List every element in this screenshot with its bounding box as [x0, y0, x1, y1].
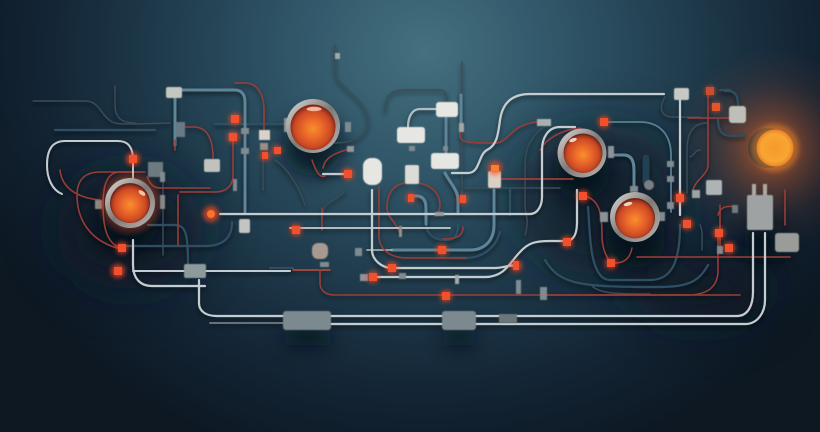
- lamp and box cast shadows: [98, 116, 781, 346]
- round knob: [644, 180, 654, 190]
- glow around red indicators: [111, 86, 735, 302]
- lamp: lower right: [610, 192, 660, 242]
- lamp: centre right: [558, 128, 606, 178]
- light grey junction boxes: [166, 87, 799, 278]
- lamp: far left: [96, 169, 164, 237]
- red indicator squares: [114, 87, 733, 300]
- navy pipes: [55, 90, 745, 287]
- dark zones on the wall: [55, 125, 770, 325]
- grey slate boxes and fittings: [95, 53, 767, 330]
- silver pipes: [47, 94, 765, 324]
- orange glow behind right lamp: [672, 48, 820, 248]
- pipe network: [33, 45, 790, 324]
- dark thin wires: [33, 45, 707, 294]
- slate wires: [367, 122, 671, 250]
- red wires: [60, 83, 790, 295]
- lamp: top centre: [286, 99, 340, 153]
- white junction boxes: [363, 102, 501, 188]
- lamp: glowing amber: [748, 124, 799, 172]
- electrical boxes and connectors: [95, 53, 799, 330]
- steel blue pipes: [175, 90, 634, 250]
